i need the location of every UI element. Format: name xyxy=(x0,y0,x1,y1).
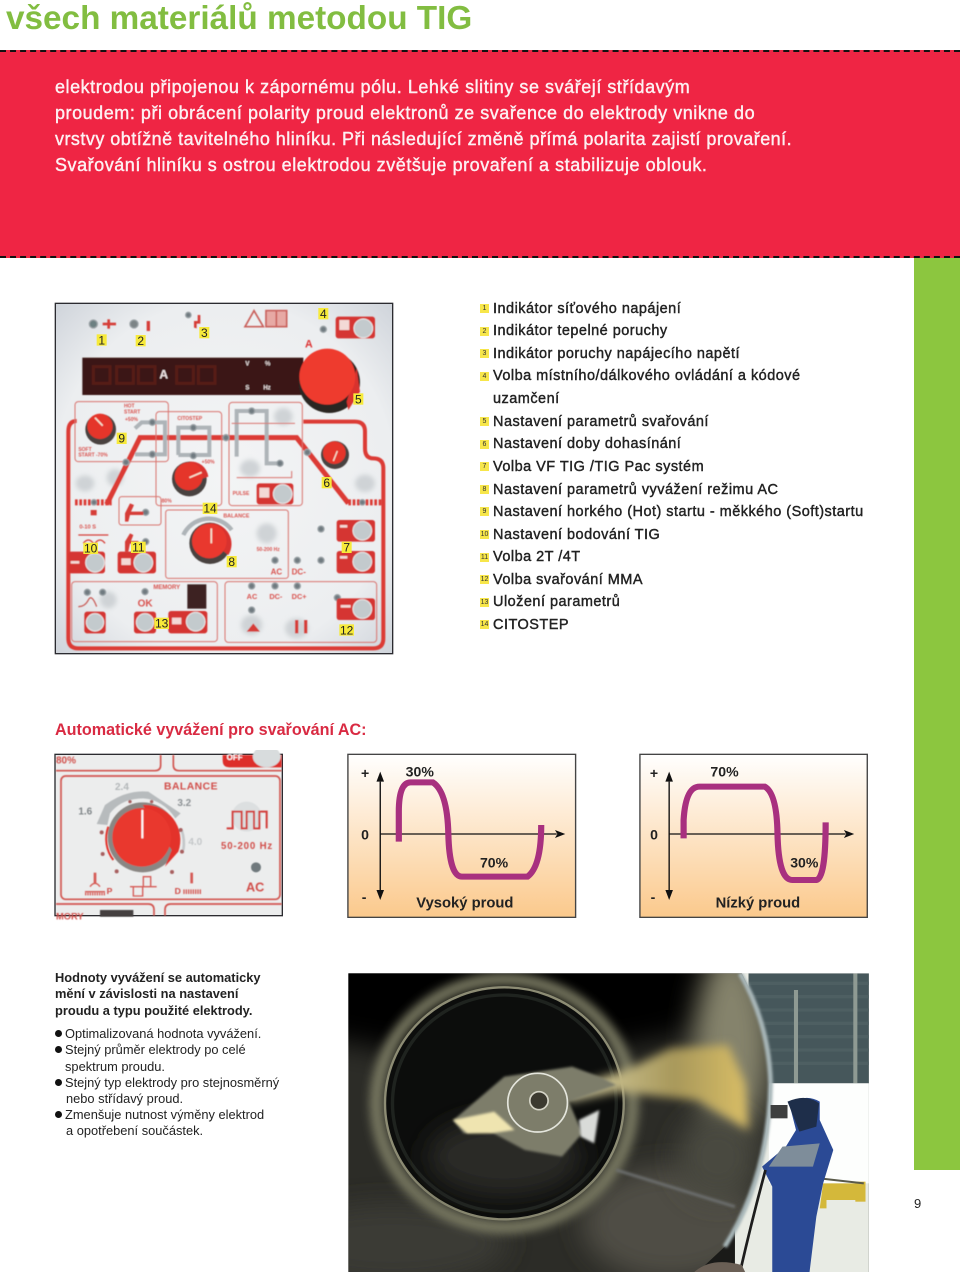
legend list: Indikátor poruchy napájecího napětí xyxy=(493,346,740,362)
warning and book icons xyxy=(245,311,287,327)
button caps xyxy=(86,319,373,631)
electrode diameter captions: 4.0 xyxy=(188,837,203,848)
numbered yellow labels: 10 xyxy=(84,542,98,556)
balance knob xyxy=(108,802,178,872)
numbered yellow labels xyxy=(83,307,363,637)
balance captions: D xyxy=(175,886,181,896)
legend list: 10 xyxy=(481,531,488,538)
display captions: A xyxy=(305,339,313,351)
page number: 9 xyxy=(914,1196,921,1211)
numbered yellow labels: 6 xyxy=(323,476,330,490)
balance knob photo xyxy=(54,750,283,921)
chart: low current: + xyxy=(650,765,658,781)
legend list: 1 xyxy=(483,305,486,312)
panel captions: BALANCE xyxy=(223,513,250,519)
legend list: 2 xyxy=(483,328,486,335)
panel captions: CITOSTEP xyxy=(177,416,203,422)
display captions: V xyxy=(245,362,249,368)
numbered yellow labels: 8 xyxy=(228,555,235,569)
numbered yellow labels: 7 xyxy=(343,541,350,555)
chart: low current: 70% xyxy=(710,764,739,780)
legend list: Indikátor síťového napájení xyxy=(493,301,681,317)
bottom wheel xyxy=(694,1262,745,1272)
legend list: Nastavení doby dohasínání xyxy=(493,436,681,452)
display captions: % xyxy=(265,362,271,368)
panel captions: PULSE xyxy=(233,491,250,497)
bold intro: Hodnoty vyvážení se automaticky xyxy=(55,970,261,985)
legend list xyxy=(480,301,864,633)
chart: low current: - xyxy=(651,889,656,905)
panel: red text band xyxy=(0,50,960,258)
benefit list: nebo střídavý proud. xyxy=(66,1091,183,1106)
inner bright blade xyxy=(453,1067,616,1157)
balance captions: MORY xyxy=(56,911,84,921)
function buttons xyxy=(68,317,375,633)
chart: high current: 0 xyxy=(361,827,369,842)
red band paragraph: Svařování hliníku s ostrou elektrodou zvětšuje provaření a stabilizuje oblouk. xyxy=(55,155,707,175)
red band paragraph: vrstvy obtížně tavitelného hliníku. Při následující změně přímá polarita zajistí provaření. xyxy=(55,129,792,149)
benefit list xyxy=(55,1026,280,1138)
electrode diameter captions xyxy=(78,782,203,848)
memory window xyxy=(100,910,133,917)
panel captions: DC- xyxy=(292,567,306,576)
LED xyxy=(251,862,261,872)
benefit list: Stejný průměr elektrody po celé xyxy=(65,1042,246,1057)
control panel image xyxy=(54,302,394,654)
legend list: Volba VF TIG /TIG Pac systém xyxy=(493,459,704,475)
chart: low current: 0 xyxy=(650,827,658,842)
benefit list: Zmenšuje nutnost výměny elektrod xyxy=(65,1107,264,1122)
panel captions: 0-10 S xyxy=(79,524,96,530)
panel captions xyxy=(78,404,307,609)
gold reflection xyxy=(562,1045,749,1130)
balance captions: BALANCE xyxy=(164,781,218,792)
concentric rings xyxy=(508,1073,567,1132)
gray circuit lines xyxy=(135,411,280,463)
legend list: Nastavení bodování TIG xyxy=(493,527,660,543)
chart: high current: 70% xyxy=(480,855,508,871)
legend list: Nastavení parametrů svařování xyxy=(493,414,709,430)
waveform icon xyxy=(232,802,262,832)
balance captions: 80% xyxy=(56,755,76,766)
memory display xyxy=(187,584,206,609)
large current knob xyxy=(299,352,360,413)
numbered yellow labels: 9 xyxy=(118,432,125,446)
balance captions xyxy=(56,753,273,921)
legend list: 8 xyxy=(483,486,486,493)
legend list: Uložení parametrů xyxy=(493,594,620,610)
numbered yellow labels: 11 xyxy=(132,541,145,555)
panel captions: DC+ xyxy=(292,592,307,601)
panel captions: MEMORY xyxy=(153,585,180,591)
electrode diameter captions: 2.4 xyxy=(115,782,129,793)
legend list: 6 xyxy=(483,441,486,448)
legend list: CITOSTEP xyxy=(493,617,569,633)
chart: low current: Nízký proud xyxy=(716,896,800,911)
bold intro: proudu a typu použité elektrody. xyxy=(55,1003,252,1018)
small knobs xyxy=(85,414,349,564)
panel captions: +50% xyxy=(202,459,215,465)
red band paragraph: elektrodou připojenou k zápornému pólu. Lehké slitiny se svářejí střídavým xyxy=(55,77,690,97)
chart: high current: - xyxy=(362,889,367,905)
waveform charts xyxy=(347,754,868,918)
chart: low current: 30% xyxy=(790,855,818,871)
legend list: Volba 2T /4T xyxy=(493,549,581,565)
panel captions: AC xyxy=(247,592,258,601)
indicator LEDs xyxy=(84,312,365,613)
legend list: Nastavení horkého (Hot) startu - měkkého (Soft)startu xyxy=(493,504,864,520)
welding photo xyxy=(348,973,869,1272)
title: všech materiálů metodou TIG xyxy=(6,0,472,37)
panel captions: SOFT xyxy=(78,447,92,453)
numbered yellow labels: 14 xyxy=(203,502,217,516)
panel captions: AC xyxy=(271,567,282,576)
scale dots xyxy=(100,800,184,874)
button glyphs xyxy=(71,320,351,624)
numbered yellow labels: 12 xyxy=(340,623,354,637)
chart: high current: 30% xyxy=(406,764,434,780)
display captions: S xyxy=(245,386,249,392)
numbered yellow labels: 4 xyxy=(320,307,327,321)
soft gray blobs xyxy=(76,408,375,638)
panel captions: +50% xyxy=(125,417,138,423)
chart: low current xyxy=(640,754,867,917)
vessel inner ring xyxy=(376,979,633,1227)
vessel rim xyxy=(725,973,771,1247)
explanatory text xyxy=(55,970,280,1138)
legend list: Nastavení parametrů vyvážení režimu AC xyxy=(493,482,778,498)
electrode diameter captions: 3.2 xyxy=(177,798,192,809)
red band paragraph: proudem: při obrácení polarity proud elektronů ze svařence do elektrody vnikne do xyxy=(55,103,755,123)
legend list: 5 xyxy=(483,418,486,425)
display captions: A xyxy=(159,367,168,381)
panel captions: DC- xyxy=(269,592,283,601)
numbered yellow labels: 3 xyxy=(201,326,208,340)
display xyxy=(82,358,303,395)
polarity symbols xyxy=(85,873,202,896)
vessel body xyxy=(348,973,770,1272)
legend list: Indikátor tepelné poruchy xyxy=(493,323,668,339)
chart: high current: + xyxy=(361,765,369,781)
bold intro: mění v závislosti na nastavení xyxy=(55,986,238,1001)
chart: high current: Vysoký proud xyxy=(416,896,513,911)
benefit list: Optimalizovaná hodnota vyvážení. xyxy=(65,1026,261,1041)
numbered yellow labels: 13 xyxy=(155,617,169,631)
legend list: 12 xyxy=(481,576,488,583)
panel frames xyxy=(56,755,282,916)
on/off button remnant xyxy=(223,755,282,767)
panel captions: START xyxy=(124,410,140,416)
panel captions: 50-200 Hz xyxy=(257,547,280,553)
balance captions: P xyxy=(107,886,113,896)
legend list: 11 xyxy=(481,554,488,561)
balance scale arc xyxy=(97,791,181,825)
small red symbols xyxy=(78,315,307,633)
red band paragraph xyxy=(54,77,792,176)
legend list: 4 xyxy=(483,373,486,380)
numbered yellow labels: 1 xyxy=(98,333,105,347)
circuit thin lines xyxy=(232,423,295,478)
legend list: 3 xyxy=(483,350,486,357)
red circuit lines xyxy=(68,402,383,648)
section heading: Automatické vyvážení pro svařování AC: xyxy=(55,721,367,739)
legend list: 9 xyxy=(483,508,486,515)
benefit list: spektrum proudu. xyxy=(65,1059,165,1074)
benefit list: Stejný typ elektrody pro stejnosměrný xyxy=(65,1075,279,1090)
display captions: Hz xyxy=(263,386,271,392)
panel captions: START -70% xyxy=(78,452,108,458)
benefit list: a opotřebení součástek. xyxy=(66,1123,203,1138)
legend list: 14 xyxy=(481,621,488,628)
panel background xyxy=(55,303,393,654)
legend list: uzamčení xyxy=(493,391,560,407)
balance captions: OFF xyxy=(227,753,243,762)
panel captions: HOT xyxy=(124,404,135,410)
legend list: Volba svařování MMA xyxy=(493,572,643,588)
panel captions: 80% xyxy=(162,498,172,504)
warehouse background xyxy=(735,973,869,1272)
electrode diameter captions: 1.6 xyxy=(78,807,93,818)
green side bar xyxy=(914,258,960,1170)
bold intro xyxy=(55,970,261,1018)
welder xyxy=(740,1098,833,1272)
numbered yellow labels: 2 xyxy=(137,334,144,348)
display captions xyxy=(159,339,313,392)
seam xyxy=(616,1170,735,1207)
chart: high current xyxy=(348,754,576,917)
panel captions: OK xyxy=(138,598,153,609)
balance captions: AC xyxy=(246,880,264,894)
numbered yellow labels: 5 xyxy=(355,392,362,406)
legend list: 7 xyxy=(483,463,486,470)
legend list: Volba místního/dálkového ovládání a kódové xyxy=(493,368,801,384)
legend list: 13 xyxy=(481,599,488,606)
balance captions: 50-200 Hz xyxy=(221,841,273,852)
